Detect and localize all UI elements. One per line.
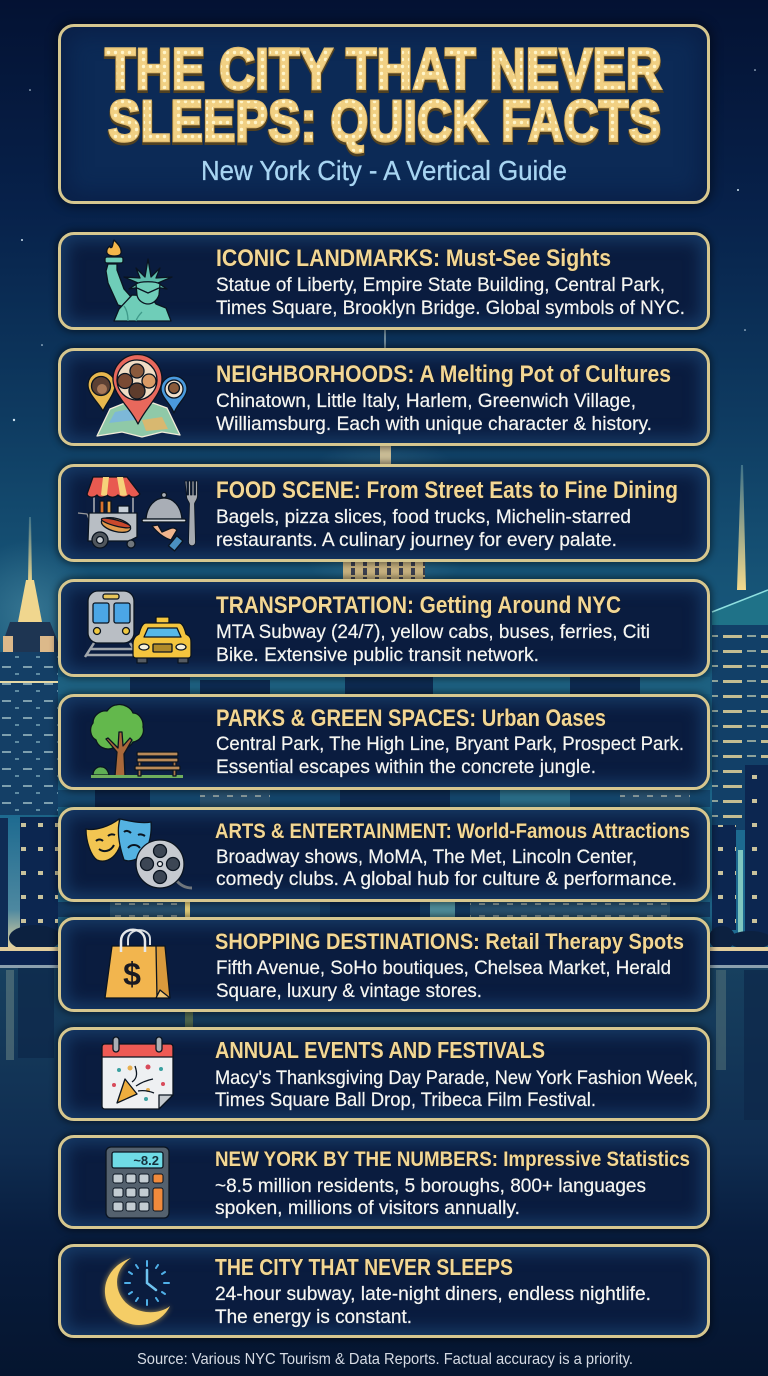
stars — [13, 69, 756, 421]
description: restaurants. A culinary journey for every palate. — [216, 529, 617, 551]
mid-ground building blocks — [58, 677, 710, 917]
icon: crescent moon and clock — [105, 1258, 170, 1325]
icon: shopping bag — [105, 930, 170, 998]
icon: subway train and taxi — [85, 591, 191, 663]
description: Statue of Liberty, Empire State Building, Central Park, — [216, 274, 665, 296]
description — [216, 621, 650, 666]
title — [105, 37, 662, 156]
icon: shopping bag: $ — [123, 956, 141, 992]
left tower — [0, 517, 61, 951]
panel: the city that never sleeps — [58, 1244, 710, 1338]
description: Williamsburg. Each with unique character & history. — [216, 413, 652, 435]
heading: SHOPPING DESTINATIONS: Retail Therapy Spots — [215, 929, 684, 954]
heading: PARKS & GREEN SPACES: Urban Oases — [216, 705, 606, 732]
panel: arts and entertainment — [58, 807, 710, 902]
description — [216, 506, 631, 551]
description — [215, 1067, 698, 1111]
description — [216, 846, 677, 890]
central spire and building — [343, 330, 425, 582]
subtitle: New York City - A Vertical Guide — [201, 155, 567, 186]
title: SLEEPS: QUICK FACTS — [108, 91, 661, 156]
description: Times Square Ball Drop, Tribeca Film Festival. — [215, 1089, 596, 1111]
title: THE CITY THAT NEVER — [105, 37, 662, 102]
heading: TRANSPORTATION: Getting Around NYC — [216, 592, 621, 619]
description — [216, 957, 671, 1002]
heading: THE CITY THAT NEVER SLEEPS — [215, 1254, 513, 1280]
panel: food scene — [58, 464, 710, 562]
panel: neighborhoods — [58, 348, 710, 446]
description: spoken, millions of visitors annually. — [215, 1197, 520, 1219]
description: Broadway shows, MoMA, The Met, Lincoln Center, — [216, 846, 637, 868]
description — [215, 1283, 651, 1328]
panel: parks — [58, 694, 710, 790]
description: Times Square, Brooklyn Bridge. Global symbols of NYC. — [216, 297, 685, 319]
title: SLEEPS: QUICK FACTS — [108, 89, 661, 154]
heading: FOOD SCENE: From Street Eats to Fine Dining — [216, 477, 678, 504]
description — [215, 1175, 646, 1219]
icon: map pins with faces — [88, 354, 187, 437]
description: MTA Subway (24/7), yellow cabs, buses, ferries, Citi — [216, 621, 650, 643]
description: comedy clubs. A global hub for culture & performance. — [216, 868, 677, 890]
icon: festive calendar — [102, 1037, 173, 1109]
heading: ARTS & ENTERTAINMENT: World-Famous Attractions — [215, 820, 690, 843]
source footer: Source: Various NYC Tourism & Data Reports. Factual accuracy is a priority. — [137, 1351, 633, 1368]
icon: theater masks and film reel — [86, 819, 192, 888]
icon: tree and bench — [91, 705, 183, 778]
description: Fifth Avenue, SoHo boutiques, Chelsea Market, Herald — [216, 957, 671, 979]
title: THE CITY THAT NEVER — [105, 39, 662, 104]
header panel — [58, 24, 710, 204]
panel: by the numbers — [58, 1135, 710, 1229]
description: Bagels, pizza slices, food trucks, Michelin-starred — [216, 506, 631, 528]
heading: NEIGHBORHOODS: A Melting Pot of Cultures — [216, 361, 671, 388]
right tower — [709, 465, 768, 950]
panel: shopping — [58, 917, 710, 1012]
description — [216, 390, 652, 435]
heading: ICONIC LANDMARKS: Must-See Sights — [216, 245, 611, 272]
panel: iconic landmarks — [58, 232, 710, 330]
heading: ANNUAL EVENTS AND FESTIVALS — [215, 1037, 545, 1063]
description: Macy's Thanksgiving Day Parade, New York Fashion Week, — [215, 1067, 698, 1089]
description: 24-hour subway, late-night diners, endless nightlife. — [215, 1283, 651, 1305]
heading: NEW YORK BY THE NUMBERS: Impressive Statistics — [215, 1147, 690, 1171]
icon: statue of liberty — [105, 240, 172, 321]
description: ~8.5 million residents, 5 boroughs, 800+ languages — [215, 1175, 646, 1197]
description: Central Park, The High Line, Bryant Park, Prospect Park. — [216, 733, 684, 755]
description: Chinatown, Little Italy, Harlem, Greenwich Village, — [216, 390, 636, 412]
description: Square, luxury & vintage stores. — [216, 980, 482, 1002]
panel: annual events — [58, 1027, 710, 1121]
description — [216, 274, 685, 319]
description: The energy is constant. — [215, 1306, 412, 1328]
description: Essential escapes within the concrete jungle. — [216, 756, 596, 778]
icon: calculator: ~8.2 — [133, 1153, 159, 1168]
description — [216, 733, 684, 778]
description: Bike. Extensive public transit network. — [216, 644, 539, 666]
icon: hot dog cart, cloche and fork — [78, 477, 198, 551]
icon: calculator — [106, 1147, 169, 1218]
panel: transportation — [58, 579, 710, 677]
waterfront and reflection — [0, 947, 768, 1376]
